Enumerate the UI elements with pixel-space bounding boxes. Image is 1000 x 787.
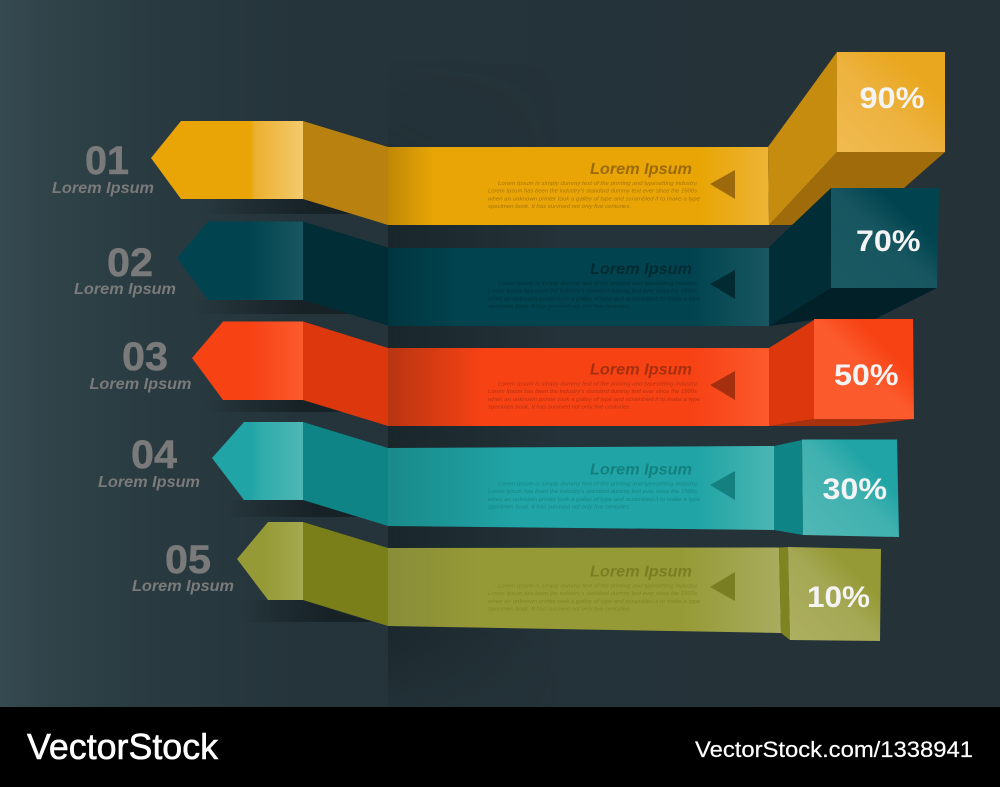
label 01: 01 [85, 139, 129, 183]
percentage 30: 30% [822, 473, 887, 506]
text block and marker 3: when an unknown printer took a galley of type and scrambled it to make a type [488, 397, 700, 403]
label 04 [98, 433, 200, 491]
end block side 1 [768, 52, 837, 225]
text block and marker 2: when an unknown printer took a galley of type and scrambled it to make a type [488, 296, 700, 302]
end block underside 3 [769, 419, 914, 426]
label 01: Lorem Ipsum [52, 180, 154, 197]
footer url: VectorStock.com/1338941 [695, 737, 973, 762]
footer brand: VectorStock [27, 726, 219, 767]
text block and marker 1: Lorem Ipsum is simply dummy text of the printing and typesetting industry. [498, 181, 698, 187]
bar 1 [388, 147, 769, 225]
text block and marker 2: Lorem Ipsum is simply dummy text of the printing and typesetting industry. [498, 281, 698, 287]
text block and marker 1: specimen book. It has survived not only five centuries. [488, 204, 631, 210]
row 3 arrow: orange [192, 319, 914, 426]
label 01 [52, 139, 154, 197]
fold 4 [303, 422, 388, 526]
end block front 5 [788, 547, 881, 641]
text block and marker 3: specimen book. It has survived not only five centuries. [488, 404, 631, 410]
end block side 5 [779, 547, 790, 640]
end block underside 2 [769, 288, 937, 326]
vertical shaded fold band [388, 225, 466, 666]
row 1 arrow: gold [151, 52, 945, 225]
end block front 2 [831, 188, 939, 288]
text block and marker 4 [488, 462, 735, 510]
text block and marker 4: Lorem Ipsum [590, 462, 692, 478]
end block underside 1 [769, 152, 945, 225]
end block front 4 [802, 440, 899, 537]
arrow head 5 [237, 522, 303, 600]
bar 2 [388, 248, 769, 326]
text block and marker 5: when an unknown printer took a galley of type and scrambled it to make a type [488, 599, 700, 605]
label 02: 02 [107, 241, 153, 285]
label 02: Lorem Ipsum [74, 281, 176, 298]
bar 4 [388, 446, 774, 530]
text block and marker 5: Lorem Ipsum has been the industry's standard dummy text ever since the 1500s [488, 591, 697, 597]
text block and marker 1: when an unknown printer took a galley of type and scrambled it to make a type [488, 196, 700, 202]
text block and marker 3: Lorem Ipsum is simply dummy text of the printing and typesetting industry. [498, 382, 698, 388]
label 03 [90, 335, 192, 393]
end block side 2 [769, 188, 831, 326]
text block and marker 2: Lorem Ipsum [590, 261, 692, 278]
text block and marker 4: Lorem Ipsum has been the industry's standard dummy text ever since the 1500s [488, 489, 697, 495]
label 04: 04 [131, 433, 178, 477]
label 05 [132, 538, 234, 595]
text block and marker 5 [488, 564, 735, 612]
row 2 arrow: dark teal [177, 188, 939, 326]
text block and marker 2: Lorem Ipsum has been the industry's standard dummy text ever since the 1500s [488, 289, 697, 295]
row 4 arrow: turquoise [212, 422, 899, 537]
percentage 50: 50% [834, 359, 898, 392]
text block and marker 1: Lorem Ipsum has been the industry's standard dummy text ever since the 1500s [488, 189, 697, 195]
end block front 1 [837, 52, 945, 152]
text block and marker 1 [488, 161, 735, 210]
end block side 4 [774, 440, 803, 535]
footer bar [0, 707, 1000, 787]
text block and marker 2: specimen book. It has survived not only five centuries. [488, 304, 631, 310]
fold 3 [303, 322, 388, 426]
drop shadows beneath arrow heads [195, 199, 372, 622]
label 04: Lorem Ipsum [98, 474, 200, 491]
text block and marker 3 [488, 362, 735, 410]
text block and marker 4: specimen book. It has survived not only five centuries. [488, 504, 631, 510]
text block and marker 4: Lorem Ipsum is simply dummy text of the printing and typesetting industry. [498, 482, 698, 488]
label 05: Lorem Ipsum [132, 578, 234, 595]
arrow head 4 [212, 422, 303, 500]
text block and marker 1: Lorem Ipsum [590, 161, 692, 178]
fold 5 [303, 522, 388, 626]
label 05: 05 [165, 538, 211, 582]
end block side 3 [769, 320, 814, 426]
arrow head 3 [192, 322, 303, 400]
text block and marker 5: specimen book. It has survived not only five centuries. [488, 606, 631, 612]
percentage 10: 10% [807, 581, 870, 614]
bar 3 [388, 348, 769, 426]
text block and marker 3: Lorem Ipsum has been the industry's standard dummy text ever since the 1500s [488, 389, 697, 395]
label 03: Lorem Ipsum [90, 376, 192, 393]
fold 1 [303, 121, 388, 225]
text block and marker 5: Lorem Ipsum [590, 564, 692, 580]
text block and marker 3: Lorem Ipsum [590, 362, 692, 378]
text block and marker 4: when an unknown printer took a galley of type and scrambled it to make a type [488, 497, 700, 503]
label 03: 03 [122, 335, 168, 379]
text block and marker 2 [488, 261, 735, 310]
percentage 70: 70% [856, 225, 920, 258]
bar 5 [388, 548, 781, 633]
row 5 arrow: olive [237, 522, 881, 641]
fold 2 [303, 222, 388, 326]
label 02 [74, 241, 176, 298]
text block and marker 5: Lorem Ipsum is simply dummy text of the printing and typesetting industry. [498, 584, 698, 590]
arrow head 2 [177, 222, 303, 300]
arrow head 1 [151, 121, 303, 199]
end block front 3 [814, 319, 914, 419]
percentage 90: 90% [860, 82, 924, 115]
